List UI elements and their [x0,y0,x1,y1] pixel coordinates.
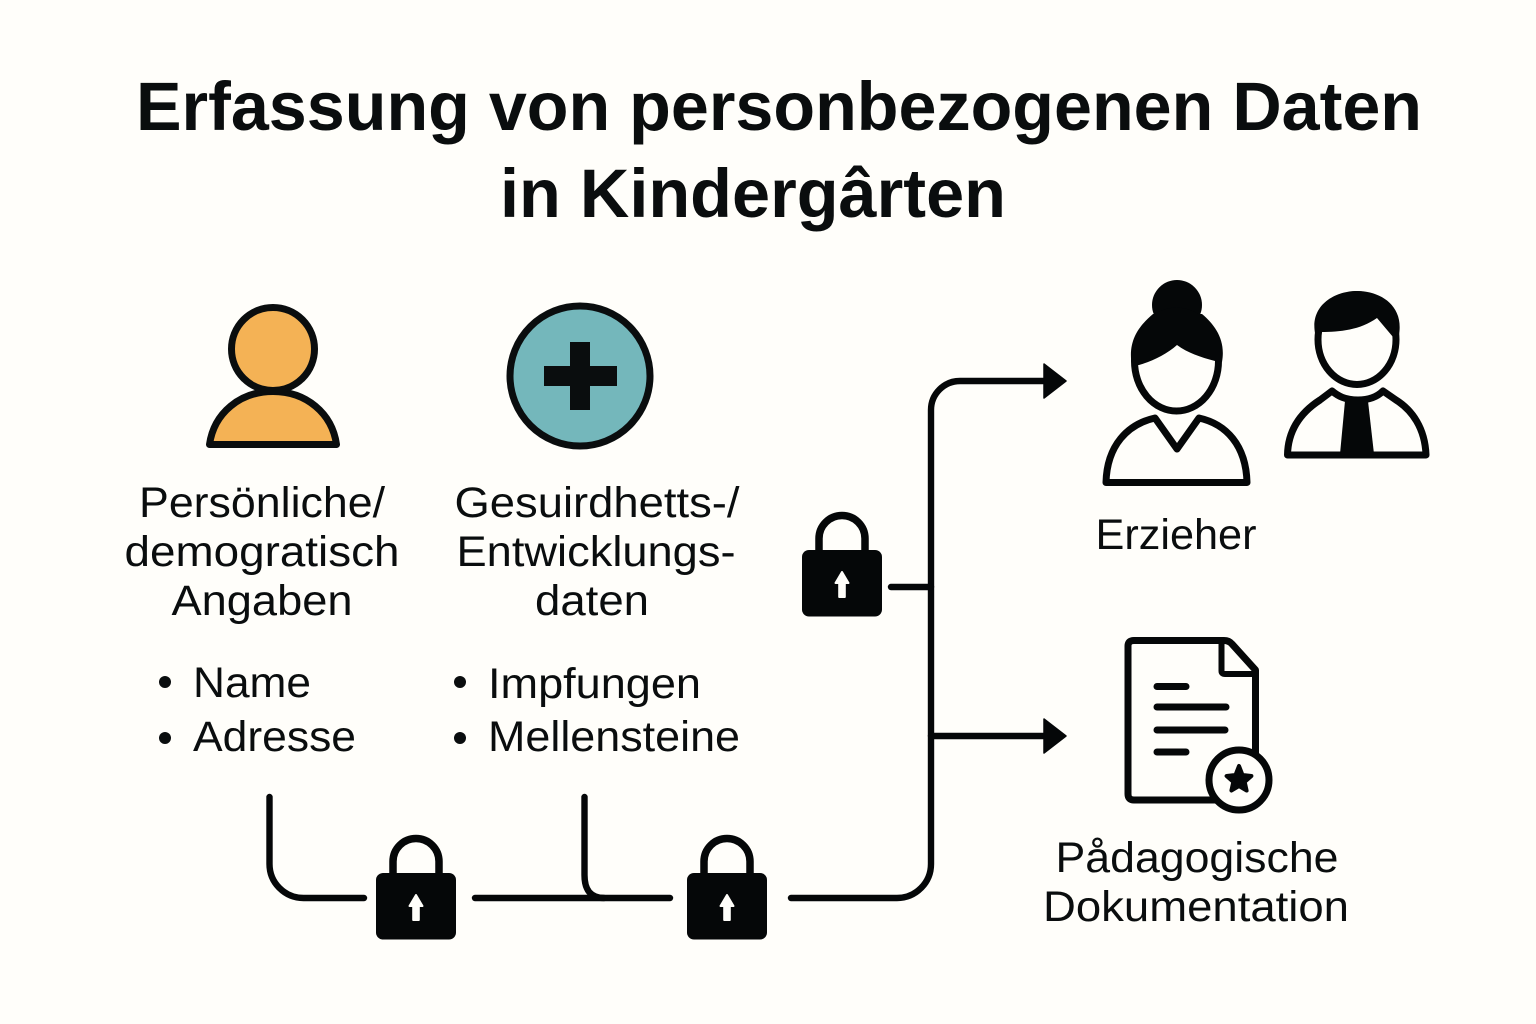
icon: lock left [376,838,456,940]
list: health data: Mellensteine [488,713,740,761]
label: documentation: Pådagogische [1056,834,1338,882]
text: health data heading: Entwicklungs- [456,528,736,576]
title: in Kindergârten [500,155,1006,232]
label: documentation [1043,834,1349,931]
title: Erfassung von personbezogenen Daten [136,68,1422,145]
list: health data: Impfungen [488,660,701,708]
arrow: to educators [1044,364,1066,398]
icon: female educator [1106,280,1247,482]
icon: lock middle [687,838,767,940]
text: health data heading: Gesuirdhetts-/ [454,479,740,527]
arrow: to documentation [1044,719,1066,753]
list: personal data: Name [193,659,311,707]
text: personal data heading: Angaben [172,577,352,625]
list: personal data: Adresse [193,713,356,761]
icon: person [210,308,336,444]
text: personal data heading: Persönliche/ [139,479,385,527]
label: educators: Erzieher [1096,511,1256,559]
list: personal data [159,659,356,761]
icon: male educator [1288,291,1426,455]
text: health data heading: daten [535,577,649,625]
icon: document with star badge [1128,640,1269,810]
list: health data [454,660,740,761]
text: health data heading [454,479,740,625]
text: personal data heading: demogratisch [124,528,400,576]
title [136,68,1422,232]
connector lines [270,381,1046,898]
label: documentation: Dokumentation [1043,883,1349,931]
icon: health cross [510,306,650,446]
icon: lock upper [802,516,882,616]
text: personal data heading [124,479,400,625]
